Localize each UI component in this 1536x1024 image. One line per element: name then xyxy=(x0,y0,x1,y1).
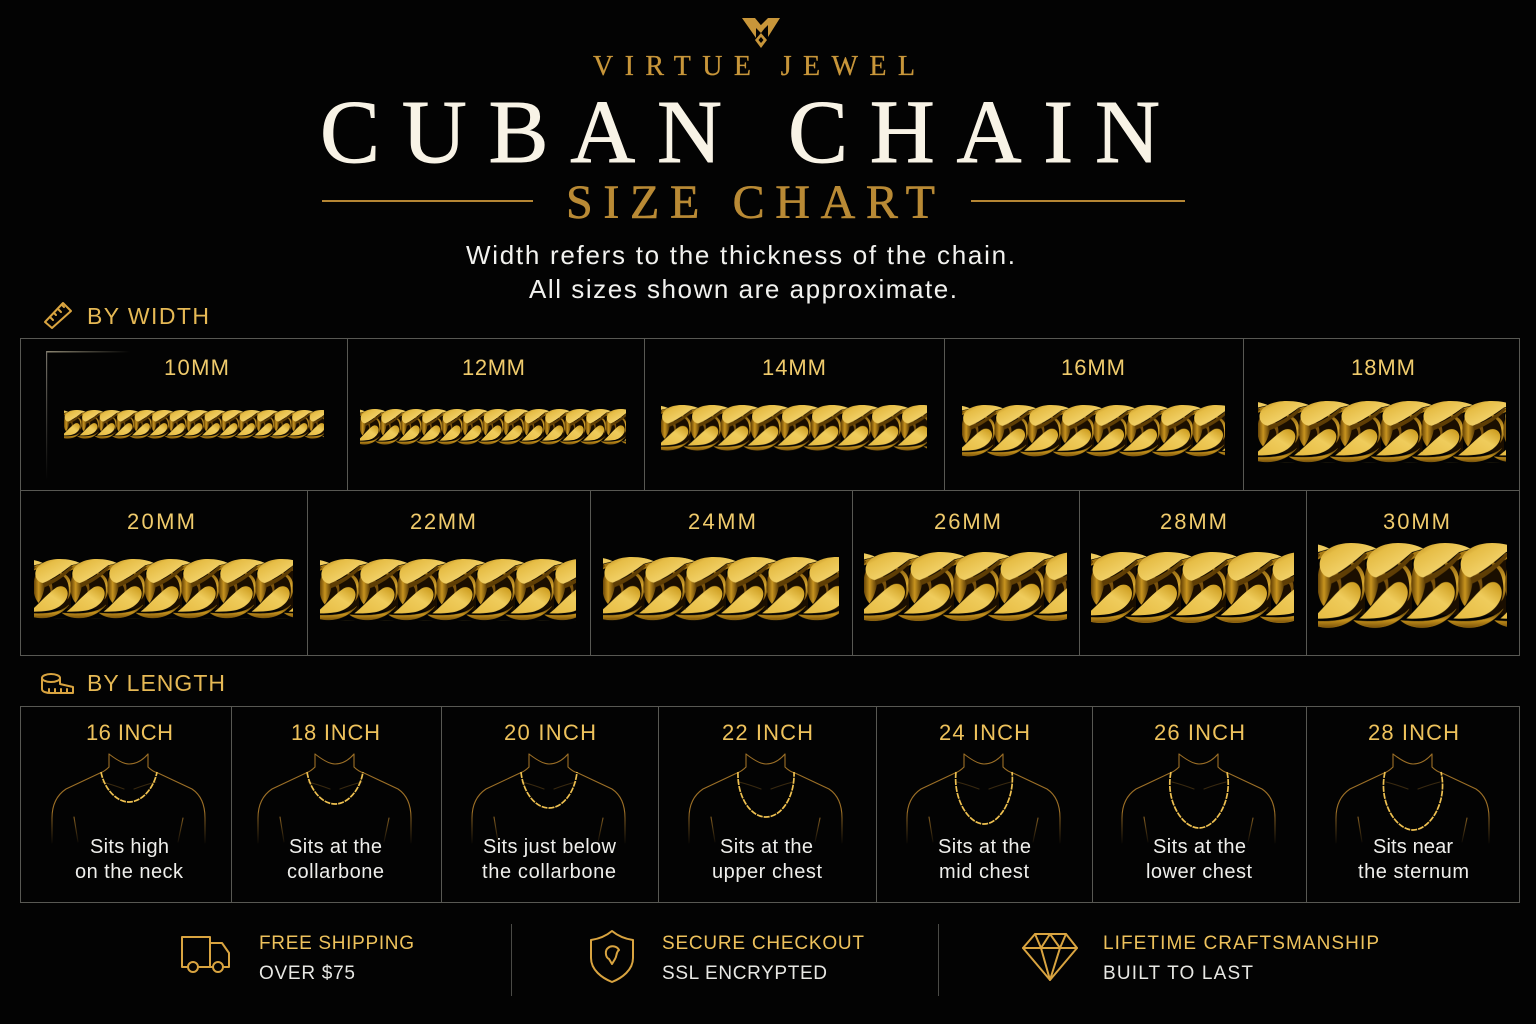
size: 10mm: 10MM xyxy=(164,355,229,380)
size: 20mm xyxy=(34,509,293,619)
feature: lifetime craftsmanship: BUILT TO LAST xyxy=(1103,963,1253,984)
size: 24mm: 24MM xyxy=(688,509,756,534)
size: 30mm xyxy=(1318,509,1507,629)
intro text xyxy=(466,240,1015,304)
size: 12mm xyxy=(360,355,626,445)
size: 24mm xyxy=(603,509,839,621)
length: 26 inch: 26 INCH xyxy=(1154,720,1245,745)
length: 22 inch: 22 INCH xyxy=(722,720,813,745)
size: 28mm xyxy=(1091,509,1294,624)
icon: ruler xyxy=(45,303,71,328)
length: 16 inch: on the neck xyxy=(75,861,184,883)
length: 18 inch xyxy=(258,720,411,883)
size: 28mm: 28MM xyxy=(1160,509,1227,534)
size: 22mm: 22MM xyxy=(410,509,476,534)
length: 24 inch: 24 INCH xyxy=(939,720,1030,745)
length: 26 inch xyxy=(1122,720,1275,883)
subtitle: SIZE CHART xyxy=(566,176,935,229)
title: CUBAN CHAIN xyxy=(320,83,1160,182)
size: 12mm: 12MM xyxy=(462,355,525,380)
length: 26 inch: Sits at the xyxy=(1153,836,1246,858)
length: 22 inch: upper chest xyxy=(712,861,822,883)
size: 26mm xyxy=(864,509,1067,622)
panel: width grid xyxy=(20,338,1520,656)
length: 24 inch xyxy=(907,720,1060,883)
feature: secure checkout: SECURE CHECKOUT xyxy=(662,933,864,954)
size: 26mm: 26MM xyxy=(934,509,1001,534)
icon: diamond xyxy=(1023,934,1077,980)
icon: truck xyxy=(182,937,229,972)
length: 20 inch: the collarbone xyxy=(482,861,616,883)
size: 22mm xyxy=(320,509,576,621)
feature: lifetime craftsmanship: LIFETIME CRAFTSMANSHIP xyxy=(1103,933,1379,954)
size: 16mm xyxy=(962,355,1225,457)
feature: secure checkout: SSL ENCRYPTED xyxy=(662,963,827,984)
length: 28 inch: 28 INCH xyxy=(1368,720,1459,745)
icon: tape measure xyxy=(42,674,73,693)
length: 20 inch: 20 INCH xyxy=(504,720,596,745)
heading: by length: BY LENGTH xyxy=(87,670,225,696)
size: 20mm: 20MM xyxy=(127,509,195,534)
feature: free shipping: OVER $75 xyxy=(259,963,355,984)
size: 18mm: 18MM xyxy=(1351,355,1415,380)
length: 26 inch: lower chest xyxy=(1146,861,1252,883)
size: 16mm: 16MM xyxy=(1061,355,1125,380)
length: 18 inch: 18 INCH xyxy=(291,720,380,745)
size: 18mm xyxy=(1258,355,1506,463)
length: 20 inch: Sits just below xyxy=(483,836,617,858)
length: 28 inch xyxy=(1336,720,1489,883)
header xyxy=(320,18,1185,304)
length: 16 inch: 16 INCH xyxy=(86,720,173,745)
icon: brand logo xyxy=(742,18,780,48)
length: 16 inch xyxy=(52,720,205,883)
length: 24 inch: Sits at the xyxy=(938,836,1031,858)
length: 28 inch: the sternum xyxy=(1358,861,1469,883)
length: 18 inch: Sits at the xyxy=(289,836,382,858)
length: 18 inch: collarbone xyxy=(287,861,384,883)
length: 28 inch: Sits near xyxy=(1373,836,1453,858)
length: 16 inch: Sits high xyxy=(90,836,169,858)
length: 22 inch xyxy=(689,720,842,883)
intro text: All sizes shown are approximate. xyxy=(529,274,957,304)
feature: secure checkout xyxy=(591,931,864,984)
size: 14mm xyxy=(661,355,927,451)
brand name: VIRTUE JEWEL xyxy=(593,51,915,82)
heading: by width: BY WIDTH xyxy=(87,303,209,329)
size: 14mm: 14MM xyxy=(762,355,826,380)
panel: length grid xyxy=(20,706,1520,902)
feature: free shipping: FREE SHIPPING xyxy=(259,933,414,954)
length: 20 inch xyxy=(472,720,625,883)
length: 22 inch: Sits at the xyxy=(720,836,813,858)
size: 30mm: 30MM xyxy=(1383,509,1450,534)
feature: free shipping xyxy=(182,933,414,984)
feature: lifetime craftsmanship xyxy=(1023,933,1379,984)
size: 10mm xyxy=(64,355,324,439)
icon: shield xyxy=(591,931,633,982)
footer xyxy=(182,924,1379,996)
length: 24 inch: mid chest xyxy=(939,861,1029,883)
intro text: Width refers to the thickness of the chain. xyxy=(466,240,1015,270)
